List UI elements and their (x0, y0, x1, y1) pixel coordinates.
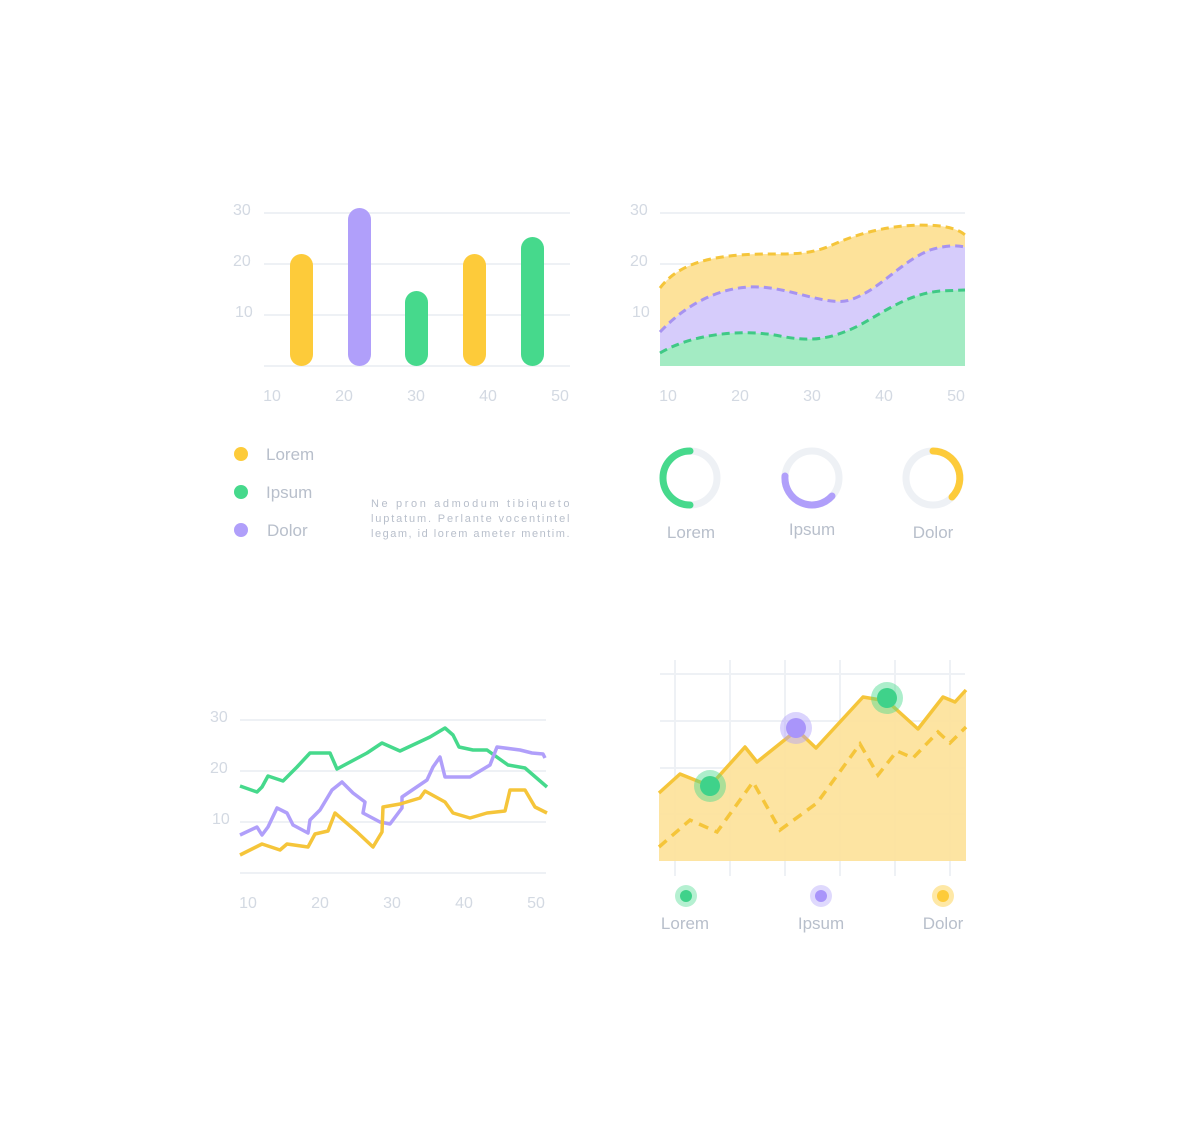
panel: stacked area chart: 50 (947, 388, 965, 405)
legend: Ipsum (266, 483, 312, 502)
panel: bar chart: 50 (551, 388, 569, 405)
panel: multi line chart (210, 709, 547, 912)
text block: Ne pron admodum tibiqueto (371, 498, 570, 510)
panel: multi line chart: 10 (239, 895, 257, 912)
panel: stacked area chart: 30 (803, 388, 821, 405)
donut charts (663, 451, 960, 542)
text block (371, 498, 570, 540)
panel: multi line chart: 30 (210, 709, 228, 726)
legend: Dolor (267, 521, 308, 540)
panel: bar chart: 30 (233, 202, 251, 219)
panel: area line chart with markers (659, 660, 966, 933)
panel: bar chart: 10 (235, 304, 253, 321)
panel: multi line chart: 10 (212, 811, 230, 828)
donut charts: Lorem (667, 523, 715, 542)
legend bottom: Ipsum (798, 914, 844, 933)
panel: bar chart: 30 (407, 388, 425, 405)
panel: stacked area chart: 30 (630, 202, 648, 219)
legend bottom: Dolor (923, 914, 964, 933)
panel: multi line chart: 30 (383, 895, 401, 912)
panel: stacked area chart: 20 (731, 388, 749, 405)
panel: bar chart: 20 (335, 388, 353, 405)
panel: stacked area chart: 10 (632, 304, 650, 321)
text block: luptatum. Perlante vocentintel (371, 513, 570, 525)
panel: stacked area chart: 40 (875, 388, 893, 405)
donut charts: Dolor (913, 523, 954, 542)
text block: legam, id lorem ameter mentim. (371, 528, 570, 540)
legend (234, 445, 314, 540)
legend: Lorem (266, 445, 314, 464)
panel: bar chart: 40 (479, 388, 497, 405)
legend bottom: Lorem (661, 914, 709, 933)
panel: multi line chart: 20 (210, 760, 228, 777)
panel: bar chart: 10 (263, 388, 281, 405)
panel: stacked area chart: 10 (659, 388, 677, 405)
panel: bar chart: 20 (233, 253, 251, 270)
panel: stacked area chart: 20 (630, 253, 648, 270)
panel: bar chart (233, 202, 570, 405)
panel: multi line chart: 40 (455, 895, 473, 912)
legend bottom (661, 885, 964, 933)
donut charts: Ipsum (789, 520, 835, 539)
markers (694, 682, 903, 802)
panel: multi line chart: 50 (527, 895, 545, 912)
panel: multi line chart: 20 (311, 895, 329, 912)
panel: stacked area chart (630, 202, 965, 405)
